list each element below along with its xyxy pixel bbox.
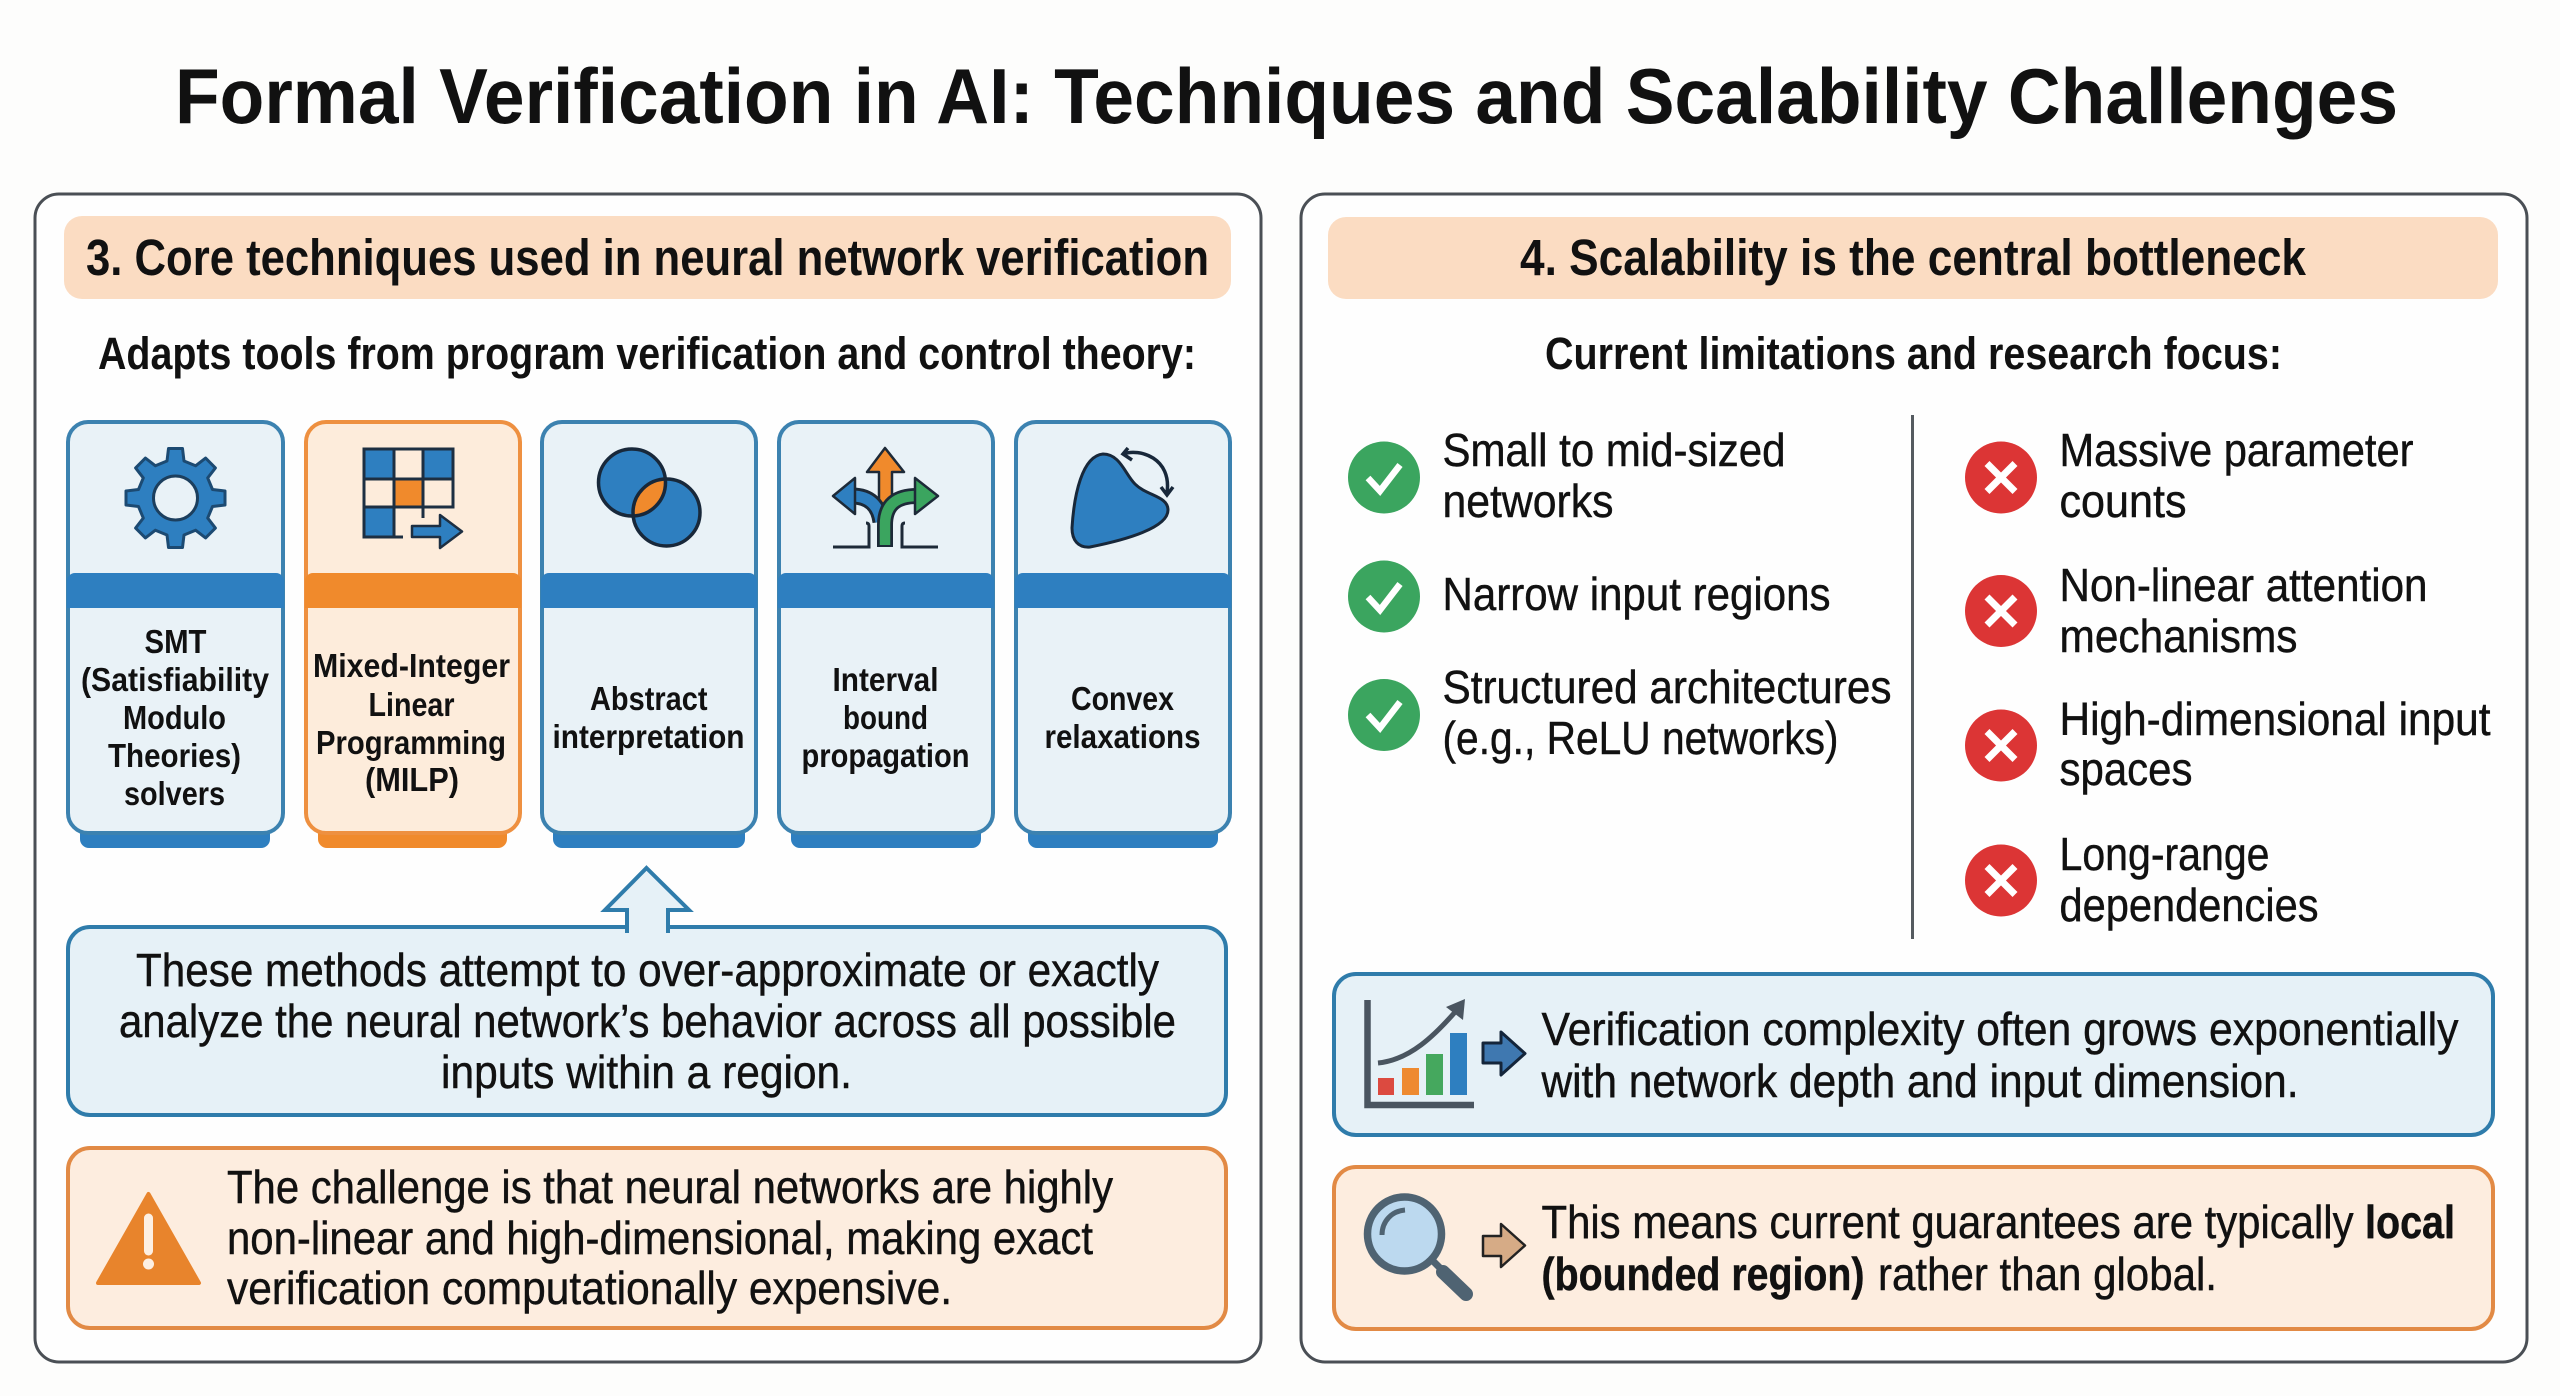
- card label: Abstract: [590, 680, 708, 717]
- card: convex relaxations: [1015, 422, 1231, 848]
- card label: (Satisfiability: [81, 661, 270, 698]
- icon: warning triangle: [98, 1194, 199, 1283]
- card label: [313, 647, 510, 798]
- callout: local guarantees: [1334, 1167, 2493, 1329]
- card: MILP: [305, 422, 521, 848]
- card label: SMT: [144, 623, 206, 660]
- callout: over-approximate: These methods attempt to over-approximate or exactly: [136, 944, 1159, 996]
- card label: [552, 680, 744, 755]
- item: input spaces: spaces: [2060, 743, 2192, 795]
- item: dependencies: [1965, 828, 2318, 931]
- list: current capabilities: [1348, 424, 1892, 764]
- arrow: right blue: [1483, 1032, 1525, 1075]
- icon: convex blob with arrow: [1072, 448, 1173, 547]
- callout: local guarantees: local: [2365, 1196, 2455, 1248]
- title: Formal Verification in AI: Techniques and Scalability Challenges: [175, 52, 2398, 140]
- callout: complexity: Verification complexity often grows exponentially: [1542, 1003, 2458, 1055]
- subheading: Adapts tools from program verification and control theory:: [98, 328, 1196, 379]
- panel: scalability: [1301, 194, 2527, 1362]
- card label: Interval: [832, 661, 938, 698]
- card label: relaxations: [1044, 718, 1200, 755]
- item: attention: mechanisms: [2060, 610, 2298, 662]
- callout: local guarantees: This means current guarantees are typically: [1542, 1196, 2354, 1248]
- callout: challenge: The challenge is that neural networks are highly: [227, 1161, 1113, 1213]
- card label: solvers: [124, 775, 225, 812]
- icon: overlapping circles: [598, 449, 700, 546]
- card label: bound: [843, 699, 928, 736]
- subheading: Current limitations and research focus:: [1545, 328, 2282, 379]
- callout: challenge: non-linear and high-dimensional, making exact: [227, 1212, 1093, 1264]
- callout: complexity: with network depth and input dimension.: [1541, 1055, 2298, 1107]
- item: attention: Non-linear attention: [2060, 559, 2428, 611]
- item: dependencies: Long-range: [2060, 828, 2270, 880]
- item: structured architectures: [1348, 661, 1892, 764]
- card label: Theories): [108, 737, 241, 774]
- card label: Programming: [316, 724, 506, 761]
- arrow: up: [605, 868, 689, 931]
- section heading 3: [64, 216, 1231, 299]
- icon: branching arrows: [833, 448, 938, 547]
- card: SMT: [67, 422, 284, 848]
- callout: over-approximate: analyze the neural network’s behavior across all possible: [119, 995, 1176, 1047]
- item: small networks: networks: [1442, 475, 1614, 527]
- item: parameter counts: counts: [2060, 475, 2186, 527]
- item: input spaces: [1965, 693, 2491, 795]
- callout: local guarantees: rather than global.: [1878, 1248, 2217, 1300]
- item: narrow input: Narrow input regions: [1442, 568, 1830, 620]
- icon: growth chart: [1368, 999, 1474, 1105]
- card label: Convex: [1071, 680, 1175, 717]
- card label: (MILP): [365, 761, 459, 798]
- callout: local guarantees: (bounded region): [1542, 1248, 1864, 1300]
- item: structured architectures: (e.g., ReLU networks): [1442, 712, 1838, 764]
- icon: grid with arrow: [364, 449, 462, 548]
- list: limitations: [1965, 424, 2491, 931]
- card label: propagation: [802, 737, 970, 774]
- arrow: right tan: [1483, 1224, 1525, 1267]
- icon: magnifier: [1368, 1197, 1466, 1294]
- callout: over-approximate: inputs within a region.: [441, 1046, 852, 1098]
- section heading 4: [1328, 217, 2498, 299]
- callout: challenge: [68, 1148, 1226, 1328]
- item: narrow input: [1348, 560, 1830, 632]
- column divider: [1911, 415, 1914, 939]
- card label: [1044, 680, 1200, 755]
- item: structured architectures: Structured architectures: [1442, 661, 1892, 713]
- item: attention: [1965, 559, 2428, 662]
- card label: Mixed-Integer: [313, 647, 510, 684]
- item: small networks: Small to mid-sized: [1442, 424, 1786, 476]
- card: interval bound propagation: [778, 422, 994, 848]
- icon: gear: [126, 448, 225, 548]
- card label: [81, 623, 270, 812]
- section heading 4: 4. Scalability is the central bottleneck: [1520, 229, 2307, 286]
- item: input spaces: High-dimensional input: [2060, 693, 2491, 745]
- item: parameter counts: Massive parameter: [2060, 424, 2414, 476]
- callout: over-approximate: [68, 868, 1226, 1115]
- card label: [802, 661, 970, 774]
- card label: Linear: [368, 686, 455, 723]
- panel: core techniques: [35, 194, 1261, 1362]
- card: abstract interpretation: [541, 422, 757, 848]
- card label: interpretation: [552, 718, 744, 755]
- item: small networks: [1348, 424, 1786, 527]
- section heading 3: 3. Core techniques used in neural network verification: [86, 229, 1209, 286]
- item: dependencies: dependencies: [2060, 879, 2318, 931]
- callout: challenge: verification computationally expensive.: [227, 1262, 952, 1314]
- callout: complexity: [1334, 974, 2493, 1135]
- item: parameter counts: [1965, 424, 2414, 527]
- card label: Modulo: [123, 699, 226, 736]
